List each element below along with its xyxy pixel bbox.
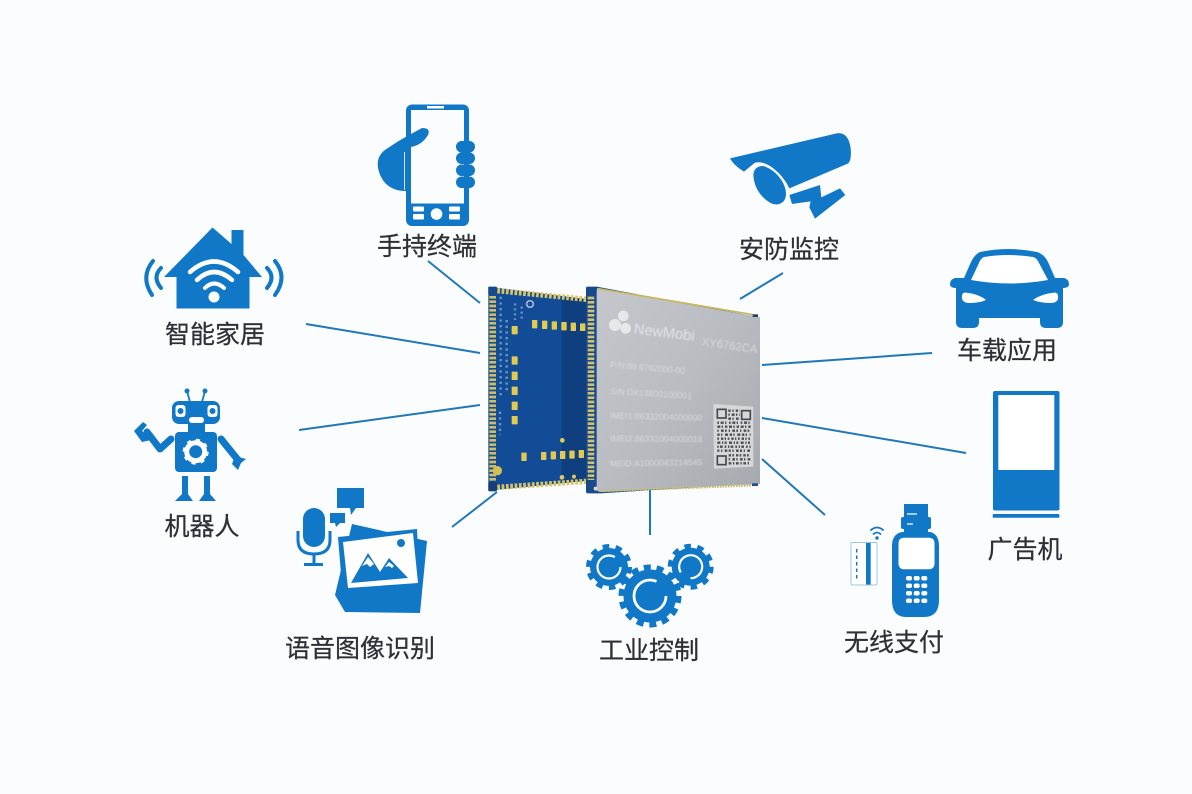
QR code [713, 404, 753, 469]
blue board [488, 287, 588, 491]
icon: car [950, 249, 1069, 328]
label: robot: 机器人 [164, 513, 240, 541]
gear: right [670, 546, 711, 587]
label: smart home: 智能家居 [165, 321, 265, 349]
icon: smart home [146, 228, 282, 308]
wifi signal [871, 528, 883, 539]
label: industrial control: 工业控制 [599, 637, 699, 665]
label: wireless payment: 无线支付 [844, 629, 944, 657]
label: security monitoring: 安防监控 [739, 236, 839, 264]
chip module [488, 287, 760, 493]
module printed text: IMEI1:86332004000000 [610, 410, 703, 423]
module printed text: P/N:89.6762000-00 [610, 359, 686, 376]
bank card [851, 542, 877, 585]
label: voice and image recognition: 语音图像识别 [285, 635, 435, 663]
connector lines [299, 261, 966, 535]
module printed text: XY6762CA [701, 336, 759, 356]
brand logo [609, 311, 631, 334]
gear: center [622, 568, 678, 624]
icon: security camera [730, 133, 851, 219]
label: advertising machine: 广告机 [987, 536, 1063, 564]
icon: wireless payment terminal [851, 504, 939, 617]
module printed text: IMEI2:86332004000018 [610, 433, 703, 444]
icon: smartphone in hand [378, 104, 475, 226]
icon: industrial gears [588, 546, 711, 624]
icon: advertising kiosk [993, 391, 1060, 518]
module printed text: MEID:A1000043214545 [610, 457, 703, 469]
module printed text [610, 321, 759, 469]
label: in-vehicle application: 车载应用 [957, 337, 1057, 365]
gear: left [588, 546, 630, 588]
icon: voice and image recognition [298, 488, 427, 613]
module printed text: S/N:DX13800100001 [610, 386, 692, 401]
metal shield module [586, 287, 760, 493]
module printed text: NewMobi [633, 321, 695, 345]
icon: robot [134, 388, 246, 501]
label: handheld terminal: 手持终端 [377, 233, 477, 261]
